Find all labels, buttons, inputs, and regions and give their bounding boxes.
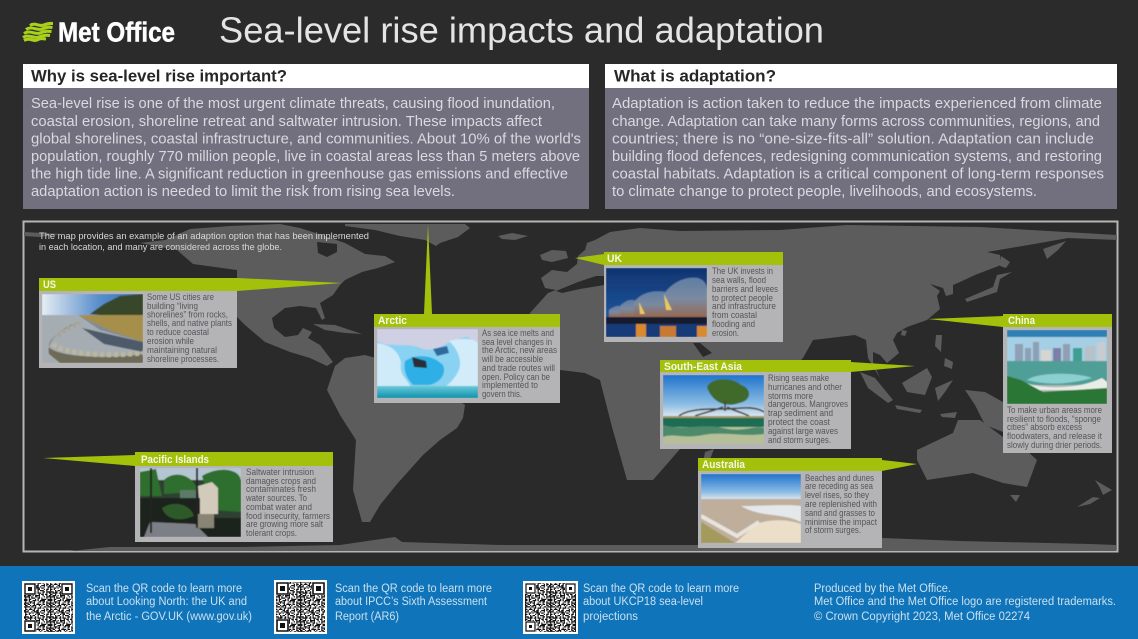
heading: why: Why is sea-level rise important?	[31, 66, 287, 86]
description: Arctic: open. Policy can be	[482, 372, 550, 382]
description: China: floodwaters, and release it	[1007, 431, 1102, 441]
description: Arctic: and trade routes will	[482, 363, 555, 373]
description: Arctic: the Arctic, new areas	[482, 345, 557, 355]
description: Australia: are receding as sea	[805, 481, 873, 491]
callout: China	[928, 314, 1112, 453]
description: Australia: minimise the impact	[805, 517, 877, 527]
description: US: shells, and native plants	[147, 318, 232, 328]
description: South-East Asia: dangerous. Mangroves	[768, 399, 848, 409]
text: Looking North: about Looking North: the UK and	[86, 596, 247, 608]
description: UK: to protect people	[712, 293, 773, 303]
text: IPCC AR6: Report (AR6)	[335, 611, 399, 623]
description: South-East Asia: protect the coast	[768, 417, 830, 427]
description: US: to reduce coastal	[147, 327, 209, 337]
photo: flooded house	[140, 468, 241, 537]
map intro text	[39, 231, 369, 253]
callout: Australia	[698, 458, 917, 548]
body text: why	[31, 95, 581, 200]
description: Pacific Islands: water sources. To	[245, 493, 307, 503]
body text: what: change. Adaptation can take many forms across communities, regions, and	[612, 113, 1100, 130]
description: US	[147, 292, 232, 364]
body text: what: Adaptation is action taken to reduce the impacts experienced from climate	[612, 95, 1102, 112]
description: Australia: are replenished with	[805, 499, 877, 509]
description: China	[1007, 405, 1102, 450]
text: credits	[814, 583, 1116, 623]
description: US: Some US cities are	[147, 292, 214, 302]
photo: living shoreline	[42, 294, 143, 363]
text: UKCP18	[583, 583, 739, 623]
text: credits: © Crown Copyright 2023, Met Office 02274	[814, 611, 1031, 623]
description: Pacific Islands: contaminates fresh	[246, 484, 316, 494]
photo: mangroves	[663, 375, 764, 444]
arrow: South-East Asia	[851, 362, 915, 372]
arrow: Australia	[882, 460, 917, 471]
description: China: cities” absorb excess	[1007, 422, 1082, 432]
description: Australia: Beaches and dunes	[805, 473, 874, 483]
description: South-East Asia: hurricanes and other	[768, 382, 842, 392]
photo: Thames Barrier	[606, 268, 707, 337]
description: UK	[712, 266, 778, 338]
body text: what	[612, 95, 1104, 200]
heading: UK: UK	[607, 253, 622, 265]
map: land masses	[24, 224, 1117, 551]
arrow: UK	[575, 254, 604, 265]
description: China: slowly during drier periods.	[1007, 440, 1102, 450]
description: Pacific Islands: are growing more salt	[246, 519, 323, 529]
text: Looking North: the Arctic - GOV.UK (www.gov.uk)	[86, 611, 252, 623]
body text: why: population, roughly 770 million people, live in coastal areas less than 5 meters above	[31, 148, 580, 165]
body text: why: global shorelines, coastal infrastructure, and communities. About 10% of the world's	[31, 130, 581, 148]
callout: Arctic	[374, 224, 560, 403]
text: Looking North	[86, 583, 252, 623]
heading: China: China	[1008, 315, 1036, 327]
description: Australia: of storm surges.	[805, 525, 861, 535]
description: Pacific Islands: food insecurity, farmers	[246, 511, 330, 521]
description: US: building “living	[147, 301, 198, 311]
heading: South-East Asia: South-East Asia	[664, 361, 743, 373]
photo: sponge city	[1007, 330, 1107, 404]
QR code: IPCC AR6	[274, 580, 327, 634]
description: Arctic: will be accessible	[481, 354, 543, 364]
description: UK: and infrastructure	[712, 301, 776, 311]
QR code: Looking North	[22, 581, 75, 634]
text: IPCC AR6: Scan the QR code to learn more	[335, 583, 492, 595]
description: South-East Asia	[768, 373, 848, 445]
map intro text: The map provides an example of an adaption option that has been implemented	[39, 231, 369, 242]
text: UKCP18: projections	[583, 611, 638, 623]
icon: wave stripes	[23, 23, 53, 40]
description: UK: erosion.	[712, 328, 739, 338]
description: US: shoreline processes.	[147, 354, 219, 364]
description: US: maintaining natural	[147, 345, 217, 355]
arrow: Pacific Islands	[43, 455, 135, 466]
description: UK: The UK invests in	[712, 266, 773, 276]
footer band	[0, 566, 1138, 639]
text: credits: Met Office and the Met Office logo are registered trademarks.	[814, 596, 1116, 608]
callout: US	[39, 278, 342, 368]
logo wordmark: Met Office	[58, 16, 175, 48]
heading: what: What is adaptation?	[614, 66, 776, 86]
description: Pacific Islands: tolerant crops.	[246, 528, 297, 538]
description: South-East Asia: and storm surges.	[768, 435, 831, 445]
description: Arctic	[481, 328, 557, 399]
body text: why: coastal erosion, shoreline retreat and saltwater intrusion. These impacts affect	[31, 113, 543, 130]
description: Pacific Islands: Saltwater intrusion	[246, 467, 314, 477]
map intro text: in each location, and many are considered across the globe.	[39, 242, 282, 253]
description: US: shorelines” from rocks,	[147, 310, 228, 320]
Met Office logo	[23, 16, 175, 48]
photo: sea ice and ship	[377, 329, 478, 398]
body text: what: countries; there is no “one-size-fits-all” solution. Adaptation can include	[612, 130, 1094, 148]
description: UK: flooding and	[712, 319, 755, 329]
description: Australia	[805, 473, 877, 535]
description: Arctic: implemented to	[482, 380, 538, 390]
description: Australia: sand and grasses to	[805, 508, 875, 518]
description: UK: barriers and levees	[712, 284, 778, 294]
description: South-East Asia: against large waves	[768, 426, 838, 436]
body text: why: Sea-level rise is one of the most urgent climate threats, causing flood inundation,	[31, 95, 555, 112]
callout: South-East Asia	[660, 360, 915, 449]
text: IPCC AR6: about IPCC’s Sixth Assessment	[335, 596, 488, 608]
text: IPCC AR6	[335, 583, 492, 623]
description: Pacific Islands: damages crops and	[246, 476, 316, 486]
heading: Australia: Australia	[702, 459, 746, 471]
text: UKCP18: Scan the QR code to learn more	[583, 583, 739, 595]
title: Sea-level rise impacts and adaptation	[219, 10, 824, 50]
description: South-East Asia: Rising seas make	[768, 373, 829, 383]
description: South-East Asia: trap sediment and	[768, 408, 833, 418]
callout: UK	[575, 252, 783, 342]
arrow: Arctic	[424, 224, 432, 314]
description: UK: sea walls, flood	[712, 275, 766, 285]
description: Pacific Islands: combat water and	[246, 502, 312, 512]
description: China: To make urban areas more	[1007, 405, 1102, 415]
description: Arctic: sea level changes in	[482, 337, 552, 347]
heading: Arctic: Arctic	[378, 315, 407, 327]
heading: US: US	[43, 279, 56, 291]
panel: why is sea-level rise important	[23, 64, 589, 209]
description: Arctic: govern this.	[482, 389, 522, 399]
callout: Pacific Islands	[43, 452, 333, 542]
description: South-East Asia: storms more	[768, 391, 813, 401]
panel: what is adaptation	[605, 64, 1117, 209]
body text: what: building flood defences, redesigning communication systems, and restoring	[612, 148, 1102, 165]
text: Looking North: Scan the QR code to learn more	[86, 583, 242, 595]
text: credits: Produced by the Met Office.	[814, 583, 951, 595]
body text: why: the high tide line. A significant reduction in greenhouse gas emissions and effective	[31, 166, 568, 182]
body text: what: coastal habitats. Adaptation is a critical component of long-term responses	[612, 166, 1104, 182]
description: China: resilient to floods, “sponge	[1007, 414, 1101, 424]
description: Arctic: As sea ice melts and	[482, 328, 554, 338]
world map panel	[24, 222, 1118, 552]
description: US: erosion while	[147, 336, 194, 346]
description: UK: from coastal	[712, 310, 757, 320]
photo: replenished beach	[701, 474, 801, 543]
description: Pacific Islands	[245, 467, 330, 538]
description: Australia: level rises, so they	[805, 490, 869, 500]
text: UKCP18: about UKCP18 sea-level	[583, 596, 703, 608]
arrow: China	[928, 316, 1003, 327]
body text: what: to climate change to protect people, livelihoods, and ecosystems.	[612, 183, 1037, 200]
map: inland seas	[317, 242, 712, 357]
QR code: UKCP18	[523, 581, 578, 634]
arrow: US	[237, 278, 342, 291]
body text: why: adaptation action is needed to limit the risk from rising sea levels.	[31, 183, 455, 200]
heading: Pacific Islands: Pacific Islands	[141, 454, 209, 466]
